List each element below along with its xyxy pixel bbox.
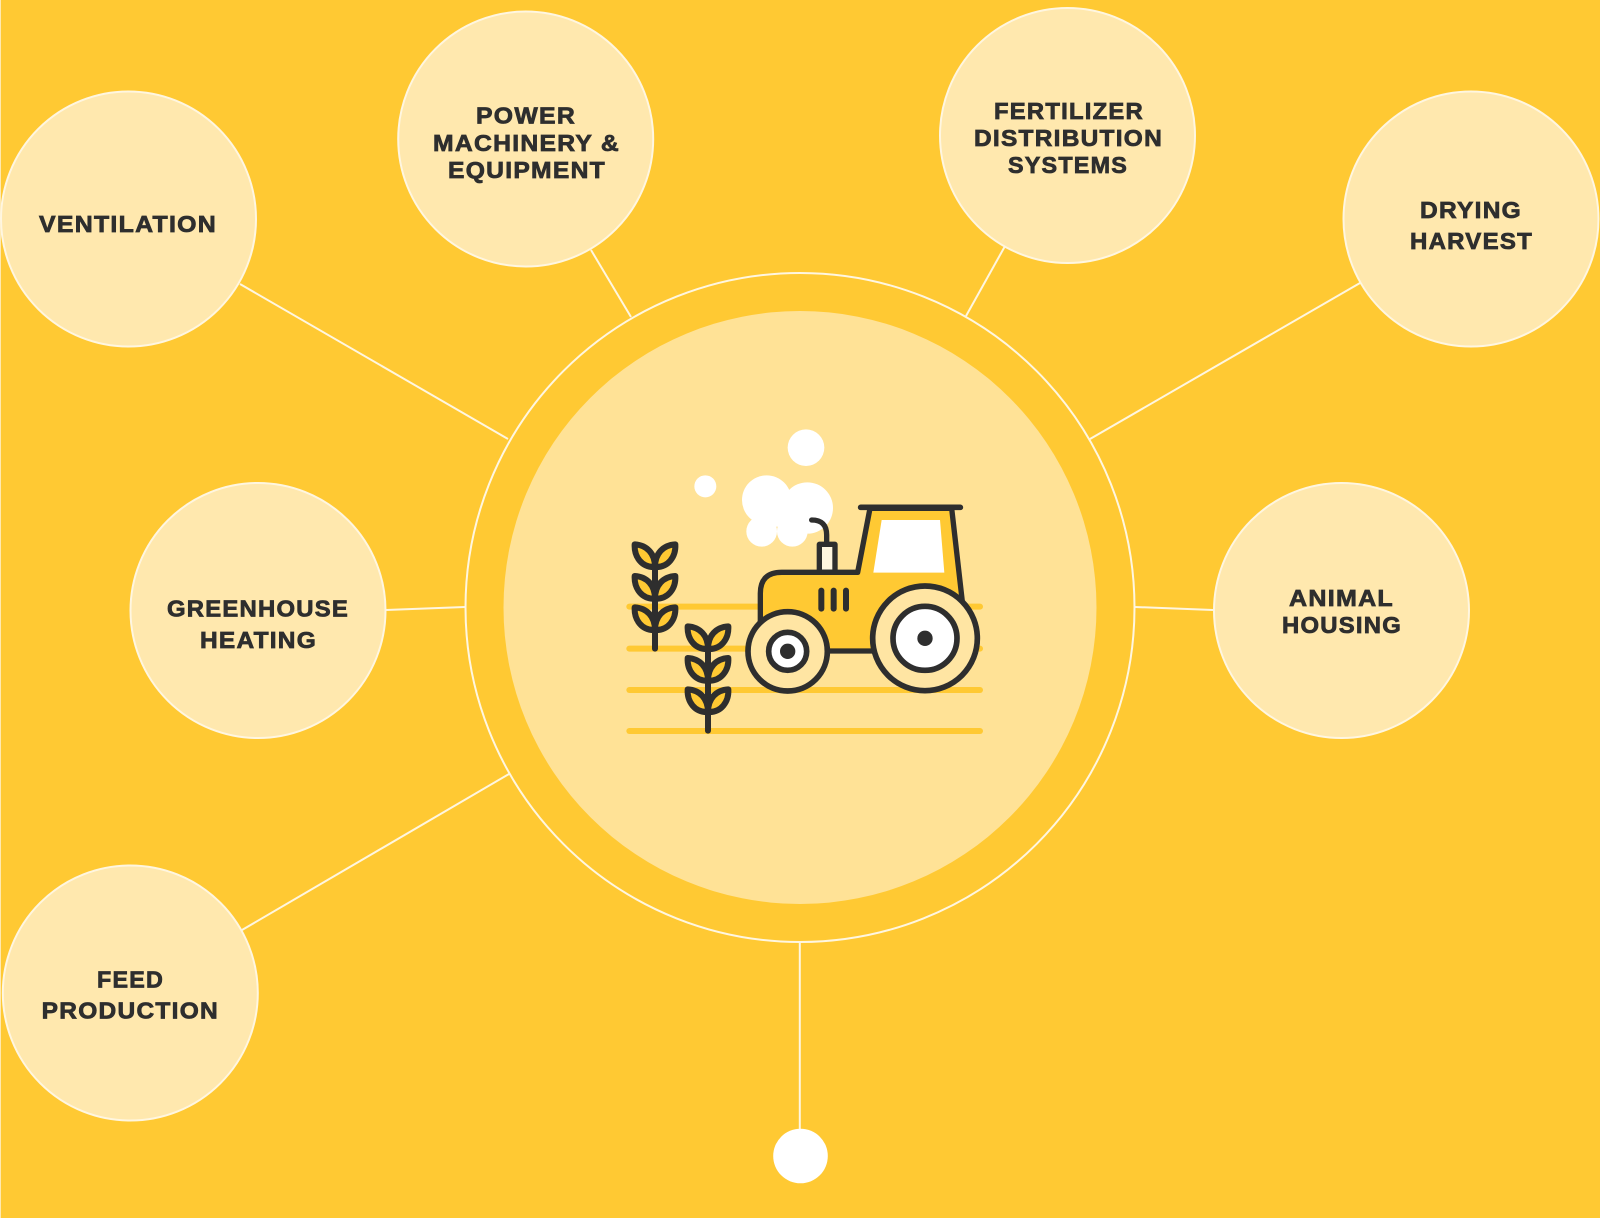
cab roof — [861, 499, 960, 516]
field furrows — [629, 607, 980, 731]
node: drying harvest: DRYING — [1420, 197, 1522, 223]
node: fertilizer distribution systems: FERTILIZER — [994, 98, 1144, 124]
rear wheel — [873, 586, 977, 691]
node: feed production: FEED — [97, 967, 164, 993]
tractor body and cab — [760, 508, 962, 651]
node: drying harvest — [1344, 92, 1598, 346]
engine vents — [821, 591, 846, 609]
node: ventilation: VENTILATION — [39, 211, 217, 237]
exhaust — [812, 520, 835, 572]
node: greenhouse heating: HEATING — [200, 627, 317, 653]
node: greenhouse heating: GREENHOUSE — [167, 596, 349, 622]
cab window — [873, 520, 944, 573]
node: animal housing: ANIMAL — [1289, 585, 1394, 611]
node: power machinery and equipment: MACHINERY & — [433, 130, 620, 156]
node: power machinery and equipment: EQUIPMENT — [448, 157, 606, 183]
icon: tractor in field — [629, 429, 980, 731]
wheat plant right — [688, 626, 728, 731]
node: fertilizer distribution systems — [940, 8, 1195, 263]
node: fertilizer distribution systems: SYSTEMS — [1008, 152, 1128, 178]
node: greenhouse heating — [130, 483, 386, 738]
smoke puffs — [694, 429, 833, 547]
node: power machinery and equipment — [398, 12, 653, 266]
node: feed production: PRODUCTION — [42, 998, 219, 1024]
node: ventilation — [1, 92, 256, 346]
tractor — [748, 507, 977, 691]
front wheel — [748, 612, 827, 691]
node: animal housing: HOUSING — [1282, 612, 1402, 638]
central ring — [466, 273, 1134, 942]
node: fertilizer distribution systems: DISTRIBUTION — [974, 125, 1163, 151]
node: drying harvest: HARVEST — [1410, 228, 1533, 254]
central disc — [504, 311, 1096, 904]
bottom white dot — [773, 1129, 828, 1183]
wheat plant left — [635, 544, 675, 649]
node: feed production — [3, 866, 258, 1120]
node: animal housing — [1214, 483, 1469, 738]
node: power machinery and equipment: POWER — [476, 102, 576, 128]
